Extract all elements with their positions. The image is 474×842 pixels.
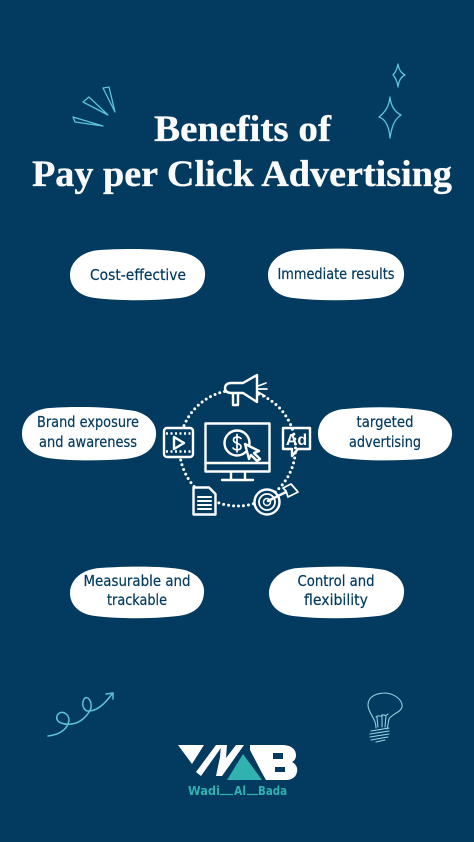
pill: control and flexibility [269, 567, 404, 618]
title [32, 109, 453, 195]
logo: Wadi Al Bada: Al [234, 784, 246, 798]
icon: sparkles [379, 64, 405, 138]
pill: measurable and trackable: trackable [107, 591, 167, 609]
icon: monitor with dollar [206, 424, 270, 480]
pill: targeted advertising [318, 407, 452, 460]
pill: measurable and trackable: Measurable and [84, 572, 190, 590]
icon: video player [164, 428, 193, 457]
dotted ring [180, 390, 296, 506]
icon: ad speech bubble [283, 428, 310, 456]
icon: document [194, 488, 216, 514]
pill: measurable and trackable [70, 567, 204, 618]
pill: brand exposure: Brand exposure [37, 413, 139, 431]
logo: Wadi Al Bada [178, 745, 297, 798]
pill: immediate results [268, 249, 404, 300]
icon: ad speech bubble: Ad [286, 432, 307, 449]
pill: targeted advertising: advertising [349, 433, 421, 451]
pill: control and flexibility: flexibility [304, 591, 368, 609]
icon: lightbulb [368, 693, 402, 742]
central marketing diagram [164, 375, 310, 514]
pill: cost-effective [70, 249, 205, 300]
icon: target with arrow [254, 484, 298, 514]
icon: megaphone [225, 375, 267, 405]
pill: targeted advertising: targeted [356, 413, 414, 431]
pill: control and flexibility: Control and [298, 572, 374, 590]
icon: decorative rays [73, 87, 115, 126]
logo: Wadi Al Bada: Bada [258, 784, 287, 798]
pill: brand exposure [22, 407, 156, 460]
pill: brand exposure: and awareness [39, 433, 137, 451]
pill: cost-effective: Cost-effective [90, 266, 186, 284]
title: Pay per Click Advertising [32, 154, 453, 195]
pill: immediate results: Immediate results [278, 265, 395, 283]
logo: Wadi Al Bada: Wadi [188, 784, 220, 798]
icon: curly arrow [48, 693, 113, 736]
title: Benefits of [154, 109, 332, 150]
